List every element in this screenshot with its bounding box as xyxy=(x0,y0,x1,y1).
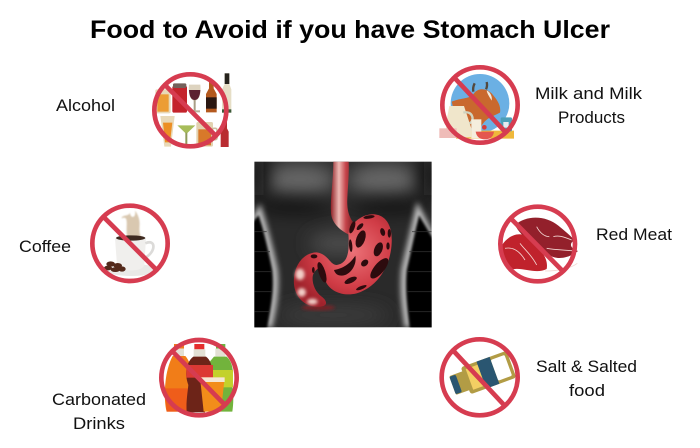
label: salt: food xyxy=(569,382,605,400)
milk jug xyxy=(446,106,473,137)
label: carbonated drinks: Drinks xyxy=(73,415,125,433)
salt shaker xyxy=(448,351,516,399)
saucer xyxy=(105,264,158,276)
label: red meat: Red Meat xyxy=(596,226,672,244)
cup xyxy=(115,235,153,270)
icon: no alcohol xyxy=(154,73,231,147)
prohibition sign xyxy=(442,67,518,143)
blue sky circle xyxy=(451,74,509,133)
glass of milk xyxy=(471,119,481,138)
fat veins xyxy=(505,227,577,271)
label: alcohol: Alcohol xyxy=(56,97,115,115)
prohibition sign xyxy=(92,206,168,281)
cocktail glass xyxy=(177,125,195,146)
dark meat cut xyxy=(515,218,578,258)
prohibition sign xyxy=(442,339,518,415)
label: carbonated drinks xyxy=(52,391,146,433)
prohibition sign xyxy=(154,74,226,146)
orange glass xyxy=(200,377,225,412)
carton xyxy=(501,117,512,131)
steam xyxy=(122,210,142,238)
label: milk xyxy=(535,85,643,127)
ulcer holes xyxy=(311,215,391,291)
label: milk: Products xyxy=(558,109,625,127)
label: milk: Milk and Milk xyxy=(535,85,643,103)
label: coffee: Coffee xyxy=(19,238,71,256)
icon: no milk products xyxy=(439,67,518,143)
label: salt xyxy=(536,358,637,400)
red can xyxy=(172,83,187,113)
torso side glow xyxy=(254,213,275,327)
central image: stomach in torso xyxy=(250,158,437,332)
prohibition sign xyxy=(500,207,575,281)
beer glass xyxy=(160,116,175,147)
cheese stack xyxy=(439,128,457,138)
title: Food to Avoid if you have Stomach Ulcer xyxy=(90,16,610,44)
red bottle xyxy=(221,120,229,147)
bowl xyxy=(476,125,494,139)
green bottle xyxy=(222,73,231,113)
prohibition sign xyxy=(161,340,237,415)
icon: no red meat xyxy=(500,207,578,281)
brown bottle xyxy=(206,80,217,112)
orange bottle xyxy=(165,344,191,412)
label: salt: Salt & Salted xyxy=(536,358,637,376)
cola bottle xyxy=(186,344,213,412)
stomach xyxy=(302,305,335,310)
green bottle xyxy=(208,344,233,412)
icon: no coffee xyxy=(92,206,168,281)
cow xyxy=(452,82,500,128)
black sides with grid xyxy=(250,215,437,332)
bright meat cut xyxy=(502,234,547,271)
beer mug left xyxy=(155,89,171,113)
beer mug right xyxy=(196,122,217,147)
label: carbonated drinks: Carbonated xyxy=(52,391,146,409)
esophagus xyxy=(331,162,354,234)
table band xyxy=(456,131,514,139)
icon: no salt xyxy=(442,339,518,415)
coffee beans xyxy=(104,261,126,272)
wine glass xyxy=(189,85,201,112)
icon: no carbonated drinks xyxy=(161,340,237,415)
